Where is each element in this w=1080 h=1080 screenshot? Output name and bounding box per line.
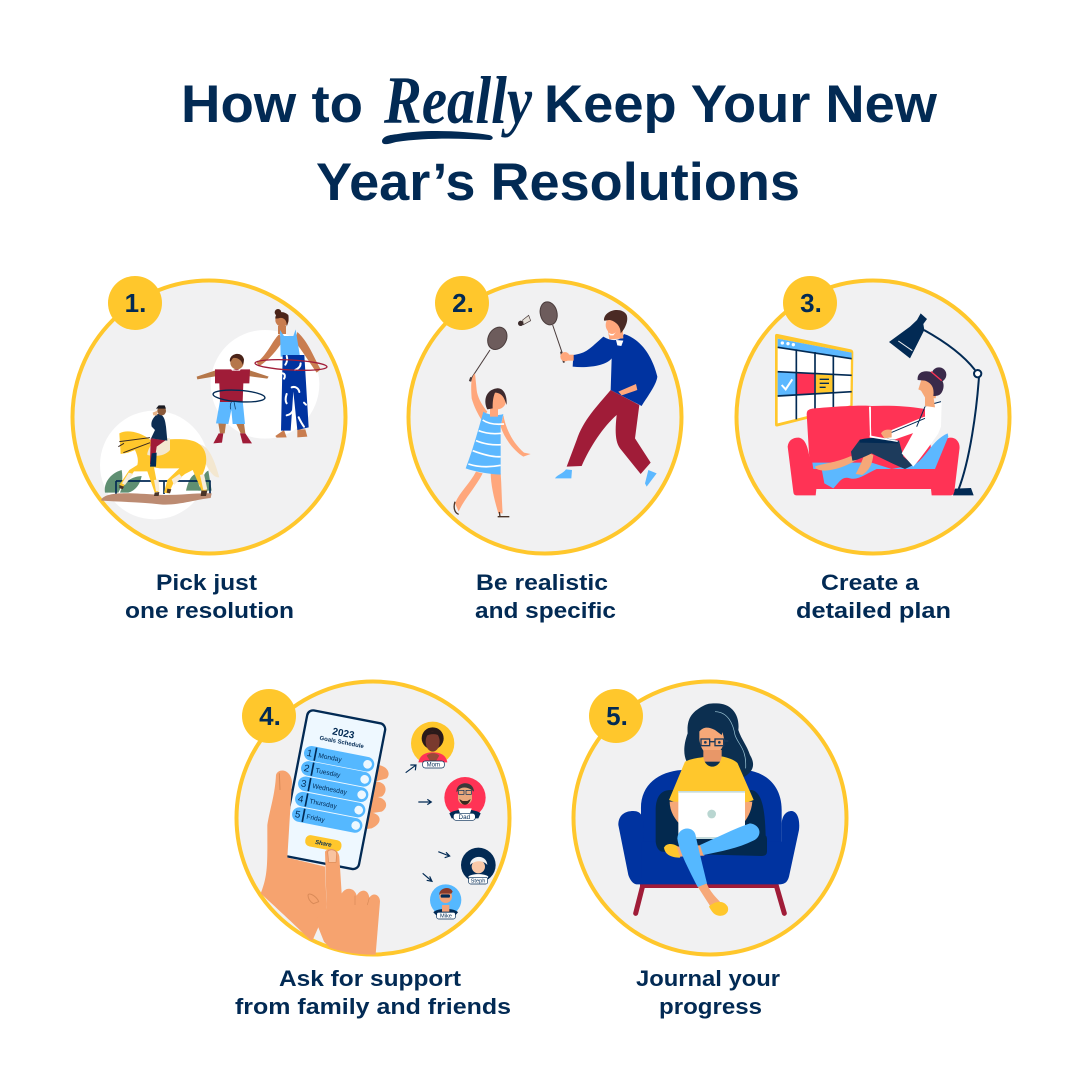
label 1: one resolution — [125, 598, 294, 623]
avatar: Mike — [430, 884, 461, 920]
shuttlecock — [518, 315, 531, 326]
panel 1: pick just one resolution — [72, 276, 346, 623]
label 2: Be realistic — [476, 570, 608, 595]
bushes — [105, 470, 212, 493]
label 3: detailed plan — [796, 598, 951, 623]
panel 3: create a detailed plan — [736, 276, 1010, 623]
label 1 — [125, 570, 294, 623]
illustration: hula hoop and horse riding — [100, 309, 327, 519]
title emphasis: Really: Really — [383, 62, 533, 138]
label 2: and specific — [475, 598, 616, 623]
label 3 — [796, 570, 951, 623]
phone: Thursday — [309, 798, 338, 811]
woman — [815, 367, 946, 475]
calendar — [775, 334, 853, 426]
avatar: Dad: Dad — [459, 814, 471, 821]
illustration: woman with laptop in armchair — [618, 703, 799, 916]
badge 3: 3. — [800, 288, 822, 318]
label 4: from family and friends — [235, 994, 511, 1019]
hand — [261, 771, 380, 958]
circle 5 — [574, 682, 846, 954]
phone: 2 — [303, 763, 310, 775]
badge 3 — [783, 276, 837, 330]
man — [567, 390, 651, 474]
ground — [101, 493, 212, 505]
avatar: Mike: Mike — [440, 914, 452, 920]
title — [181, 62, 938, 212]
label 5: progress — [659, 994, 762, 1019]
illustration: woman on sofa with calendar and lamp — [775, 313, 981, 495]
sofa — [788, 406, 960, 495]
phone: Friday — [306, 814, 326, 824]
circle 2 — [408, 280, 682, 554]
badge 1 — [108, 276, 162, 330]
panel 5: journal your progress — [574, 682, 846, 1019]
avatar: Steph — [461, 848, 496, 885]
badge 5 — [589, 689, 643, 743]
cushion — [656, 790, 767, 856]
badge 4: 4. — [259, 701, 281, 731]
left shoe — [664, 844, 682, 858]
woman — [257, 334, 283, 366]
hair — [684, 703, 753, 778]
illustration: badminton players — [454, 300, 657, 517]
label 5 — [636, 966, 780, 1019]
circle 1 — [72, 280, 346, 554]
label 2 — [475, 570, 616, 623]
top — [669, 756, 754, 803]
laptop — [678, 791, 745, 839]
armchair — [618, 770, 799, 884]
avatar: Mom — [411, 722, 454, 769]
badge 2: 2. — [452, 288, 474, 318]
illustration: phone, hand and family avatars — [261, 709, 496, 958]
face — [699, 722, 724, 755]
phone: Goals Schedule — [319, 736, 365, 750]
lamp — [889, 313, 981, 495]
label 4: Ask for support — [279, 966, 462, 991]
title: Keep Your New — [544, 75, 938, 134]
label 5: Journal your — [636, 966, 780, 991]
phone: 2023 — [331, 726, 356, 742]
panel 2: be realistic and specific — [408, 276, 682, 623]
circle 4 — [236, 682, 510, 954]
girl — [471, 373, 487, 420]
phone: Share — [314, 840, 333, 849]
avatar: Mom: Mom — [427, 763, 440, 769]
panel 4: ask for support — [235, 682, 511, 1019]
back fingers — [367, 765, 389, 829]
avatar: Steph: Steph — [471, 879, 485, 885]
label 3: Create a — [821, 570, 920, 595]
phone: 4 — [297, 794, 305, 806]
title: Year’s Resolutions — [316, 153, 800, 212]
boy — [197, 370, 269, 379]
circle 3 — [736, 280, 1010, 554]
phone: Wednesday — [312, 783, 348, 797]
phone: Monday — [318, 752, 343, 764]
rider — [147, 438, 170, 456]
badge 4 — [242, 689, 296, 743]
chair legs — [636, 883, 784, 913]
phone: Tuesday — [315, 768, 342, 779]
badge 5: 5. — [606, 701, 628, 731]
phone: 3 — [300, 778, 307, 790]
label 4 — [235, 966, 511, 1019]
blanket and pillow — [812, 463, 892, 488]
phone: 5 — [294, 809, 301, 821]
tail — [198, 444, 219, 477]
badge 1: 1. — [125, 288, 146, 318]
avatar: Dad — [444, 777, 486, 821]
phone — [280, 709, 386, 870]
fence — [116, 481, 211, 494]
horse — [119, 431, 207, 493]
rackets — [470, 300, 564, 381]
arrows to family — [406, 765, 450, 881]
phone: 1 — [306, 748, 313, 760]
legs — [700, 823, 759, 855]
badge 2 — [435, 276, 489, 330]
title: How to — [181, 75, 363, 134]
label 1: Pick just — [156, 570, 258, 595]
